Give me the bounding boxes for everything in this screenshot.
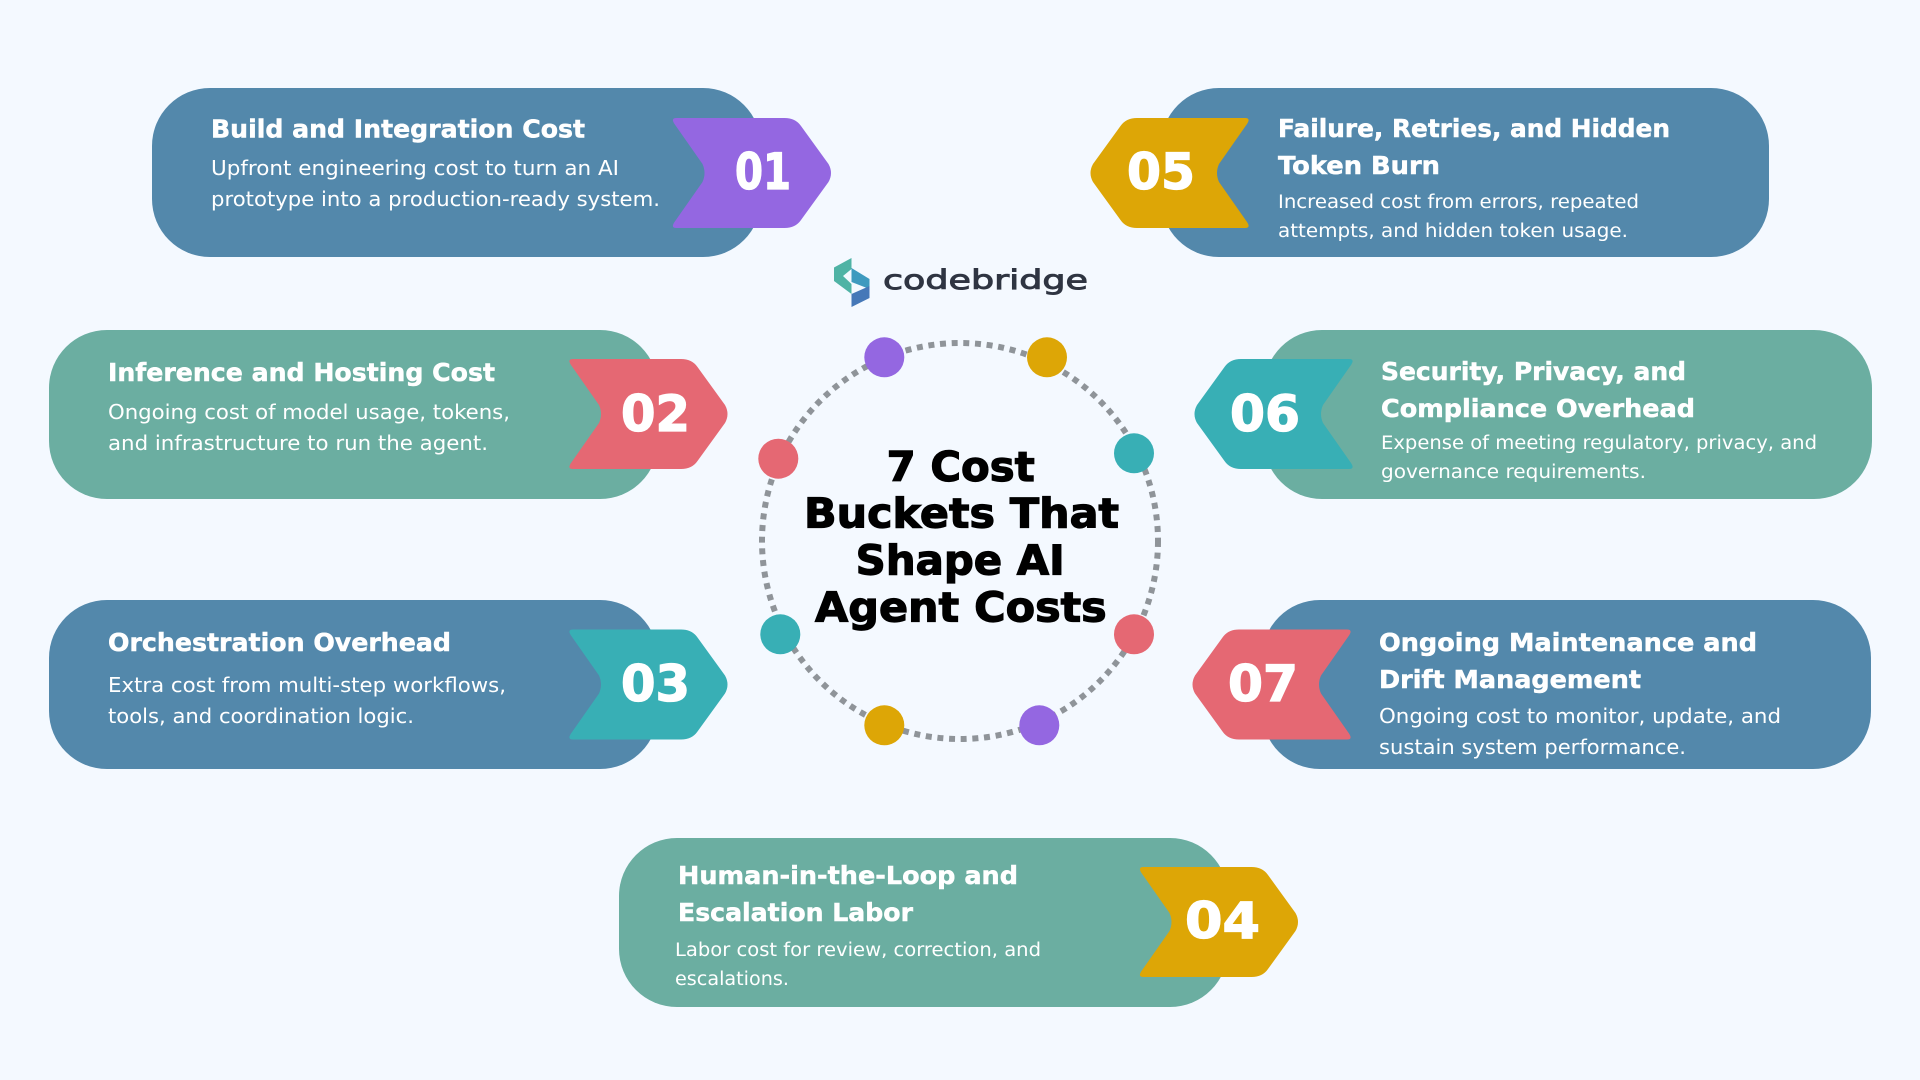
panel: 01 build and integration cost (152, 88, 831, 257)
badge: 02 (569, 359, 728, 469)
panel: 02 inference and hosting cost (49, 330, 728, 499)
text: maintenance description: sustain system performance. (1379, 735, 1686, 759)
badge: 07 (1192, 630, 1351, 740)
panel: 03 orchestration overhead (49, 600, 728, 769)
node: gold bottom left (864, 705, 904, 745)
text: inference description: and infrastructure to run the agent. (108, 431, 488, 455)
badge: 01 (673, 118, 831, 228)
node: teal right (1114, 433, 1154, 473)
heading: build and integration cost: Build and Integration Cost (211, 114, 585, 144)
heading: inference and hosting cost: Inference and Hosting Cost (108, 358, 495, 387)
text: orchestration description (108, 673, 506, 728)
heading: ongoing maintenance and drift management: Drift Management (1379, 665, 1641, 694)
badge: 01: 01 (735, 143, 791, 201)
panel: 07 ongoing maintenance and drift management (1192, 600, 1871, 769)
badge: 07: 07 (1228, 655, 1298, 713)
node: purple top left (864, 337, 904, 377)
title: 7 cost buckets that shape ai agent costs: Agent Costs (815, 584, 1107, 632)
text: build description: Upfront engineering cost to turn an AI (211, 156, 619, 180)
text: human labor description: Labor cost for review, correction, and (675, 940, 1041, 961)
text: failure description: Increased cost from errors, repeated (1278, 192, 1639, 213)
heading: security, privacy, and compliance overhead: Security, Privacy, and (1381, 357, 1686, 386)
badge: 04 (1140, 867, 1298, 977)
text: build description (211, 156, 660, 211)
heading: failure, retries, and hidden token burn: Token Burn (1278, 151, 1440, 180)
text: codebridge wordmark: codebridge (883, 265, 1088, 296)
badge: 05: 05 (1127, 143, 1195, 201)
text: build description: prototype into a production-ready system. (211, 187, 660, 211)
panel: 04 human-in-the-loop and escalation labor (619, 838, 1298, 1007)
text: human labor description: escalations. (675, 969, 789, 990)
node: teal lower left (760, 614, 800, 654)
title: 7 cost buckets that shape ai agent costs (804, 443, 1119, 632)
text: maintenance description: Ongoing cost to monitor, update, and (1379, 704, 1781, 728)
node: coral upper left (758, 439, 798, 479)
text: security description: Expense of meeting regulatory, privacy, and (1381, 433, 1817, 454)
title: 7 cost buckets that shape ai agent costs: 7 Cost (887, 443, 1035, 491)
heading: orchestration overhead: Orchestration Overhead (108, 628, 451, 657)
heading: failure, retries, and hidden token burn (1278, 114, 1670, 180)
badge: 03: 03 (621, 655, 690, 713)
text: inference description (108, 400, 510, 455)
heading: ongoing maintenance and drift management (1379, 628, 1757, 694)
text: orchestration description: Extra cost from multi-step workflows, (108, 673, 506, 697)
node: purple bottom right (1019, 705, 1059, 745)
icon: codebridge mark (834, 258, 870, 307)
text: security description (1381, 433, 1817, 483)
logo: codebridge (834, 258, 1088, 307)
heading: failure, retries, and hidden token burn: Failure, Retries, and Hidden (1278, 114, 1670, 143)
text: inference description: Ongoing cost of model usage, tokens, (108, 400, 510, 424)
text: maintenance description (1379, 704, 1781, 759)
node: gold top right (1027, 337, 1067, 377)
panel: 06 security, privacy, and compliance overhead (1194, 330, 1872, 499)
badge: 02: 02 (621, 385, 690, 443)
text: security description: governance requirements. (1381, 462, 1646, 483)
title: 7 cost buckets that shape ai agent costs: Shape AI (856, 536, 1065, 584)
heading: ongoing maintenance and drift management: Ongoing Maintenance and (1379, 628, 1757, 657)
dotted ring with coloured nodes (758, 337, 1158, 745)
heading: security, privacy, and compliance overhead: Compliance Overhead (1381, 394, 1695, 423)
text: failure description: attempts, and hidden token usage. (1278, 221, 1628, 242)
title: 7 cost buckets that shape ai agent costs: Buckets That (804, 490, 1119, 538)
badge: 03 (569, 630, 728, 740)
badge: 06 (1194, 359, 1353, 469)
heading: security, privacy, and compliance overhead (1381, 357, 1695, 423)
heading: human-in-the-loop and escalation labor: Human-in-the-Loop and (678, 861, 1018, 890)
badge: 04: 04 (1185, 892, 1260, 950)
text: orchestration description: tools, and coordination logic. (108, 704, 414, 728)
badge: 05 (1090, 118, 1249, 228)
text: human labor description (675, 940, 1041, 990)
node: coral lower right (1114, 614, 1154, 654)
badge: 06: 06 (1230, 385, 1300, 443)
text: failure description (1278, 192, 1639, 242)
heading: human-in-the-loop and escalation labor (678, 861, 1018, 927)
panel: 05 failure, retries, and hidden token burn (1090, 88, 1769, 257)
heading: human-in-the-loop and escalation labor: Escalation Labor (678, 898, 914, 927)
